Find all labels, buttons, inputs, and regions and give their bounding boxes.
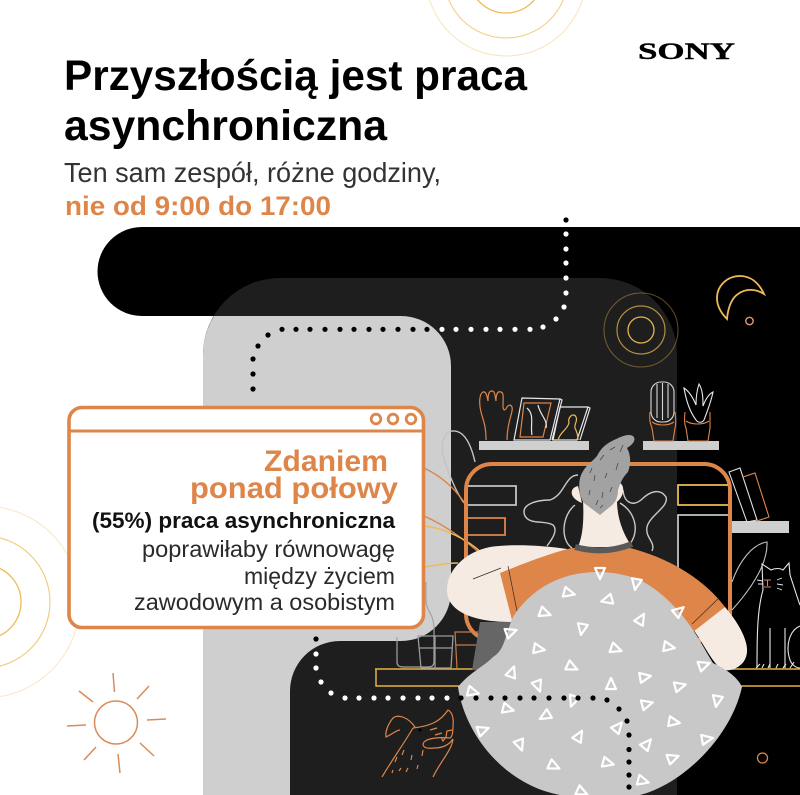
sleeve lines [473,566,719,624]
top concentric circles [426,0,586,56]
picture frames [514,398,590,440]
icon: moon [717,276,764,325]
cables [424,431,666,567]
left arm [447,545,567,622]
callout window [69,408,424,628]
icon: sun [67,673,166,773]
shelves [479,441,789,533]
icon: hand [480,391,512,440]
desk line left [375,669,475,686]
window title bar line [69,430,423,432]
title: Przyszłością jest praca [64,52,528,100]
torso [500,548,725,632]
dotted path: lower [313,636,632,790]
dark panel [203,278,677,795]
hair [579,435,634,515]
subtitle [64,157,441,221]
callout body [92,508,395,615]
patterned blob [458,568,742,795]
bottle [397,582,434,667]
books [729,468,769,522]
dotted path: upper [250,217,569,392]
grey panel [203,316,451,795]
desk line right [725,669,800,686]
leg [472,622,520,670]
left concentric circles [0,506,80,698]
black background band [98,227,800,795]
subtitle: nie od 9:00 do 17:00 [65,191,331,221]
subtitle: Ten sam zespół, różne godziny, [64,157,441,188]
icon: cat [732,542,800,668]
right arm [690,607,747,670]
callout body: poprawiłaby równowagę [142,536,395,562]
title: asynchroniczna [64,102,388,150]
box [455,632,478,668]
monitor [466,464,730,640]
callout body: zawodowym a osobistym [134,589,395,615]
callout body: (55%) praca asynchroniczna [92,508,395,533]
window frame [69,408,424,628]
callout heading: Zdaniem [264,445,388,478]
plants [650,382,713,441]
person [447,435,747,670]
hair strands [589,445,623,508]
ears [572,482,623,504]
small circle [758,753,768,763]
neck [578,500,632,547]
concentric circles on dark panel [604,293,678,367]
logo: SONY: SONY [638,39,736,64]
callout heading [190,445,398,505]
glass [418,636,453,668]
collar [575,544,632,550]
icon: dog [382,710,453,777]
callout body: między życiem [244,563,395,589]
window buttons [371,414,416,424]
triangle pattern [467,568,723,795]
title [64,52,528,150]
callout heading: ponad połowy [190,472,398,505]
